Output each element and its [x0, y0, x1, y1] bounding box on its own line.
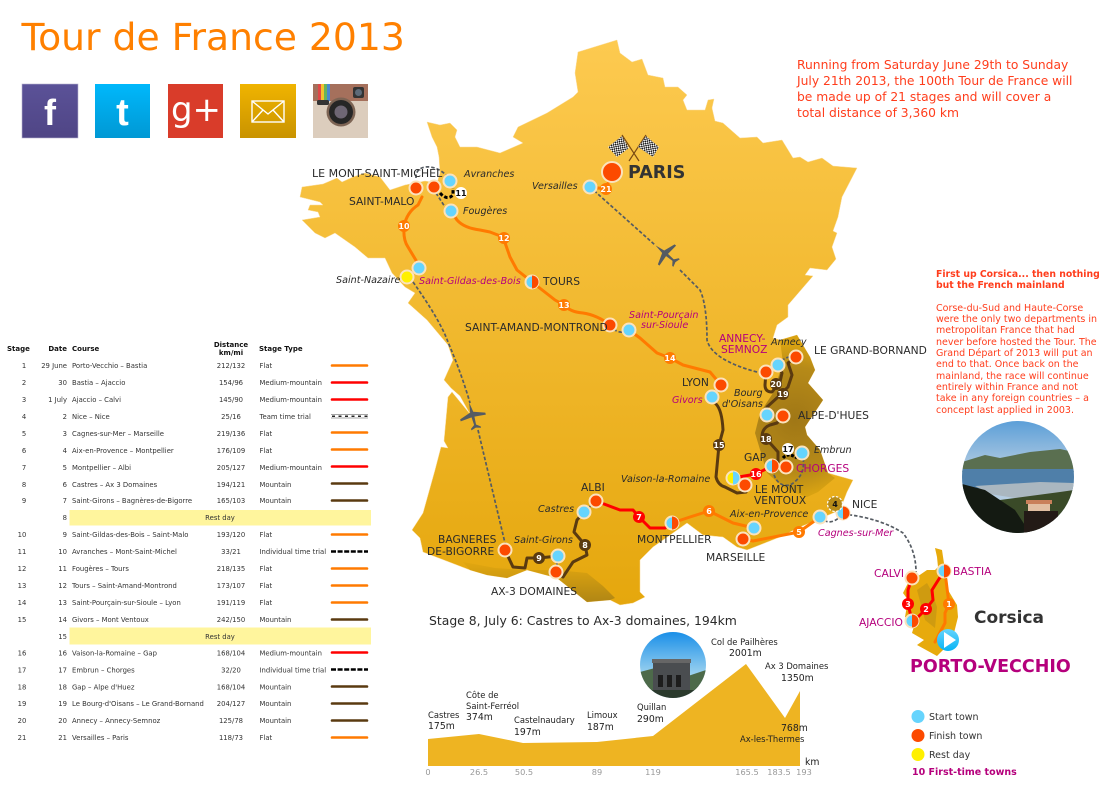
table header	[7, 341, 303, 357]
legend	[912, 710, 1017, 778]
icon: google plus	[168, 84, 223, 138]
table rows: 4	[63, 447, 67, 455]
table rows: 17	[58, 666, 67, 674]
intro text: July 21th 2013, the 100th Tour de France will	[796, 74, 1072, 88]
Corsica text block: mainland, the race will continue	[936, 371, 1089, 382]
table rows: 10	[58, 548, 67, 556]
stage number badges: 16	[750, 470, 762, 479]
table rows: Rest day	[205, 633, 235, 641]
map labels: Avranches	[463, 169, 514, 180]
table rows: Aix-en-Provence – Montpellier	[72, 447, 174, 455]
table rows: 16	[18, 650, 26, 658]
map labels: Annecy	[770, 337, 807, 348]
table rows	[18, 362, 326, 742]
chart labels: 197m	[514, 727, 541, 738]
table rows: 168/104	[217, 684, 245, 692]
social icons	[22, 84, 368, 138]
table rows: 14	[58, 616, 67, 624]
map labels: sur-Sioule	[641, 320, 688, 331]
stage number badges	[398, 183, 955, 615]
elevation profile	[425, 613, 828, 777]
table rows: 168/104	[217, 650, 245, 658]
chart labels: km	[805, 757, 819, 768]
table rows: 20	[58, 717, 67, 725]
table rows: 8	[22, 481, 26, 489]
table rows: 2	[63, 413, 67, 421]
Corsica text block: take in any foreign countries – a	[936, 393, 1089, 404]
chart labels: Côte de	[466, 690, 499, 700]
table rows: Medium-mountain	[260, 379, 322, 387]
Corsica text block: entirely within France and not	[936, 382, 1078, 393]
chart labels: 1350m	[781, 673, 814, 684]
Corsica text block: Grand Départ of 2013 will put an	[936, 348, 1093, 359]
table rows: Vaison-la-Romaine – Gap	[72, 650, 157, 658]
chart labels: 175m	[428, 721, 455, 732]
map labels: CHORGES	[796, 462, 849, 475]
table rows: 3	[63, 430, 67, 438]
table rows: 118/73	[219, 734, 243, 742]
table rows: 154/96	[219, 379, 243, 387]
table rows: Avranches – Mont-Saint-Michel	[72, 548, 177, 556]
transfer dashed lines	[413, 167, 916, 572]
table rows: 218/135	[217, 565, 245, 573]
table rows: 193/120	[217, 531, 245, 539]
area chart	[428, 664, 800, 766]
table rows: 125/78	[219, 717, 243, 725]
table rows: 10	[18, 531, 26, 539]
table rows: Nice – Nice	[72, 413, 110, 421]
Corsica text block: concept last applied in 2003.	[936, 405, 1074, 416]
chart axis: 183.5	[767, 767, 791, 777]
map labels: DE-BIGORRE	[427, 545, 494, 558]
table rows: 4	[22, 413, 26, 421]
table: stages	[7, 341, 371, 742]
table rows: 18	[58, 684, 67, 692]
Corsica text block: were the only two departments in	[936, 314, 1097, 325]
chart labels: 374m	[466, 712, 493, 723]
table rows: 21	[18, 734, 26, 742]
table rows: Flat	[260, 430, 273, 438]
Corsica text block: metropolitan France that had	[936, 325, 1075, 336]
table rows: Flat	[260, 531, 273, 539]
table rows: Ajaccio – Calvi	[72, 396, 121, 404]
stage number badges: 12	[498, 234, 510, 243]
icon: chequered flags	[608, 135, 659, 161]
map labels: MARSEILLE	[706, 551, 766, 564]
chart labels: 2001m	[729, 648, 762, 659]
title: Tour de France 2013	[20, 15, 405, 59]
table rows: 5	[22, 430, 26, 438]
table rows: Mountain	[260, 684, 291, 692]
stage routes	[404, 172, 949, 642]
map labels: LE MONT	[755, 483, 804, 496]
table rows: 25/16	[221, 413, 241, 421]
table rows: 32/20	[221, 666, 241, 674]
table header: Stage	[7, 345, 30, 353]
heading: Porto-Vecchio: PORTO-VECCHIO	[910, 657, 1071, 677]
stage number badges: 7	[636, 513, 642, 522]
table rows: Team time trial	[258, 413, 311, 421]
icon: twitter	[95, 84, 150, 138]
legend: Finish town	[929, 731, 982, 742]
map labels: ALBI	[581, 481, 605, 494]
chart labels: Ax 3 Domaines	[765, 661, 828, 671]
table rows: Flat	[260, 447, 273, 455]
chart labels: 290m	[637, 714, 664, 725]
map: France	[300, 40, 958, 656]
chart labels: Castelnaudary	[514, 715, 575, 725]
table rows: 219/136	[217, 430, 245, 438]
intro text: Running from Saturday June 29th to Sunday	[797, 58, 1068, 72]
table rows: 21	[58, 734, 67, 742]
stage type line keys	[331, 366, 368, 738]
table rows: 14	[18, 599, 26, 607]
table header: km/mi	[219, 349, 243, 357]
table rows: Individual time trial	[260, 548, 326, 556]
table rows: 16	[58, 650, 67, 658]
table rows: Porto-Vecchio – Bastia	[72, 362, 147, 370]
map labels: LE GRAND-BORNAND	[814, 344, 927, 357]
table rows: Medium-mountain	[260, 650, 322, 658]
heading: stage 8: Stage 8, July 6: Castres to Ax-3 domaines, 194km	[429, 613, 737, 628]
map labels: Aix-en-Provence	[729, 509, 808, 520]
icon: google plus: g+	[171, 90, 221, 130]
table rows: 173/107	[217, 582, 245, 590]
table rows: 7	[63, 497, 67, 505]
table rows: 20	[18, 717, 26, 725]
chart axis: 26.5	[470, 767, 488, 777]
chart labels: Ax-les-Thermes	[740, 734, 804, 744]
table header: Stage Type	[259, 345, 303, 353]
stage number badges: 21	[600, 185, 612, 194]
table rows: 6	[63, 481, 67, 489]
table rows: 7	[22, 464, 26, 472]
stage number badges: 17	[782, 445, 794, 454]
chart labels: 187m	[587, 722, 614, 733]
table rows: Annecy – Annecy-Semnoz	[72, 717, 161, 725]
stage number badges: 18	[760, 435, 772, 444]
table rows: Saint-Pourçain-sur-Sioule – Lyon	[72, 599, 181, 607]
table rows: Embrun – Chorges	[72, 666, 135, 674]
table rows: Medium-mountain	[260, 396, 322, 404]
table rows: Mountain	[260, 481, 291, 489]
legend: 10 First-time towns	[912, 767, 1017, 778]
mainland outline	[300, 40, 857, 605]
table rows: Bastia – Ajaccio	[72, 379, 125, 387]
stage number badges: 20	[770, 380, 782, 389]
table rows: 6	[22, 447, 26, 455]
map labels: SEMNOZ	[721, 343, 768, 356]
table rows: 13	[58, 599, 67, 607]
map labels: LYON	[682, 376, 709, 389]
map labels: MONTPELLIER	[637, 533, 712, 546]
table rows: Montpellier – Albi	[72, 464, 131, 472]
table rows: Givors – Mont Ventoux	[72, 616, 149, 624]
chart axis: 0	[425, 767, 431, 777]
table rows: 145/90	[219, 396, 243, 404]
Corsica text block: but the French mainland	[936, 280, 1065, 291]
table header: Distance	[214, 341, 248, 349]
icon: plane north	[647, 235, 685, 273]
icon: twitter: t	[116, 92, 129, 134]
Pyrenees mountains	[463, 562, 615, 602]
table rows: Flat	[260, 565, 273, 573]
table rows: 18	[18, 684, 26, 692]
map labels	[312, 163, 992, 629]
stage number badges: 9	[536, 554, 542, 563]
table rows: 205/127	[217, 464, 245, 472]
table rows: 242/150	[217, 616, 245, 624]
chart labels: Saint-Ferréol	[466, 701, 519, 711]
stage number badges: 6	[706, 507, 712, 516]
Corsica mountains	[917, 583, 937, 628]
table rows: Flat	[260, 582, 273, 590]
table rows: 191/119	[217, 599, 245, 607]
legend: Rest day	[929, 750, 971, 761]
stage number badges: 8	[582, 541, 588, 550]
table rows: 12	[58, 582, 67, 590]
stage number badges: 15	[713, 441, 725, 450]
table rows: Cagnes-sur-Mer – Marseille	[72, 430, 164, 438]
intro text: be made up of 21 stages and will cover a	[797, 90, 1051, 104]
map labels: Fougères	[463, 205, 507, 217]
table rows: Versailles – Paris	[72, 734, 129, 742]
map labels: BAGNERES	[438, 533, 497, 546]
Corsica text block: never before hosted the Tour. The	[936, 337, 1097, 348]
map labels: TOURS	[542, 275, 580, 288]
map labels: AJACCIO	[859, 616, 903, 629]
table rows: 33/21	[221, 548, 241, 556]
chart labels: Castres	[428, 710, 459, 720]
table rows: 13	[18, 582, 26, 590]
heading: Corsica: Corsica	[974, 608, 1044, 628]
table rows: 3	[22, 396, 26, 404]
table rows: 29 June	[41, 362, 67, 370]
table rows: Flat	[260, 362, 273, 370]
table header: Date	[48, 345, 67, 353]
table rows: 1	[22, 362, 26, 370]
chart labels	[428, 637, 828, 768]
table rows: Castres – Ax 3 Domaines	[72, 481, 158, 489]
stage number badges: 11	[455, 189, 467, 198]
table rows: 165/103	[217, 497, 245, 505]
map labels: LE MONT-SAINT-MICHEL	[312, 167, 443, 180]
stage number badges: 14	[664, 354, 676, 363]
table rows: Gap – Alpe d'Huez	[72, 684, 135, 692]
intro text: total distance of 3,360 km	[797, 106, 959, 120]
map labels: Versailles	[532, 181, 578, 192]
stage number badges: 13	[558, 301, 570, 310]
table rows: 2	[22, 379, 26, 387]
icon: instagram	[313, 84, 368, 138]
table rows: 15	[18, 616, 26, 624]
chart labels: 768m	[781, 723, 808, 734]
Corsica text block	[936, 269, 1100, 416]
chart axis: 50.5	[515, 767, 533, 777]
table rows: 5	[63, 464, 67, 472]
map labels: Givors	[672, 395, 703, 406]
chart axis: 89	[592, 767, 602, 777]
map labels: AX-3 DOMAINES	[491, 585, 577, 598]
map labels: BASTIA	[953, 565, 992, 578]
chart labels: Quillan	[637, 702, 666, 712]
photo: Col de Pailhères	[640, 632, 706, 698]
map labels: Saint-Gildas-des-Bois	[419, 276, 521, 287]
table rows: Le Bourg-d'Oisans – Le Grand-Bornand	[72, 700, 204, 708]
table rows: 9	[22, 497, 26, 505]
map labels: Embrun	[814, 445, 852, 456]
table rows: 8	[63, 514, 67, 522]
table rows: 30	[58, 379, 67, 387]
Corsica island	[903, 548, 958, 656]
map labels: PARIS	[628, 163, 685, 183]
stage number badges: 2	[923, 605, 929, 614]
table header: Course	[72, 345, 100, 353]
rest day bars	[70, 510, 371, 644]
map labels: ANNECY-	[719, 332, 766, 345]
table rows: Mountain	[260, 616, 291, 624]
chart axis	[425, 767, 812, 777]
table rows: 1 July	[48, 396, 67, 404]
stage number badges: 1	[946, 600, 952, 609]
table rows: Rest day	[205, 514, 235, 522]
table rows: Tours – Saint-Amand-Montrond	[71, 582, 177, 590]
icon: facebook	[22, 84, 78, 138]
chart labels: Limoux	[587, 710, 618, 720]
table rows: Fougères – Tours	[72, 565, 129, 573]
table rows: Flat	[260, 734, 273, 742]
table rows: 17	[18, 666, 26, 674]
table rows: 212/132	[217, 362, 245, 370]
map labels: SAINT-MALO	[349, 195, 414, 208]
chart axis: 193	[796, 767, 812, 777]
icon: facebook: f	[44, 92, 57, 133]
map labels: CALVI	[874, 567, 904, 580]
table rows: Individual time trial	[260, 666, 326, 674]
map labels: GAP	[744, 451, 767, 464]
map labels: Saint-Nazaire	[336, 275, 401, 286]
stage number badges: 4	[832, 500, 838, 509]
table rows: Flat	[260, 599, 273, 607]
table rows: 194/121	[217, 481, 245, 489]
map labels: SAINT-AMAND-MONTROND	[465, 321, 608, 334]
map labels: Castres	[538, 504, 574, 515]
photo: Corsica harbour	[962, 421, 1074, 533]
icon: Porto-Vecchio start	[937, 629, 959, 651]
map labels: Bourg	[734, 388, 763, 399]
chart labels: Col de Pailhères	[711, 637, 778, 647]
table rows: Mountain	[260, 717, 291, 725]
map labels: NICE	[852, 498, 878, 511]
Corsica text block: First up Corsica... then nothing	[936, 269, 1100, 280]
map labels: VENTOUX	[754, 494, 806, 507]
stage number badges: 10	[398, 222, 410, 231]
table rows: Medium-mountain	[260, 464, 322, 472]
map labels: Saint-Girons	[514, 535, 573, 546]
map labels: Cagnes-sur-Mer	[818, 528, 894, 539]
Corsica text block: end to that. Once back on the	[936, 359, 1079, 370]
table rows: 176/109	[217, 447, 245, 455]
icon: mail	[240, 84, 296, 138]
Alps mountains	[755, 335, 835, 497]
icon: plane south	[457, 399, 489, 432]
chart axis: 165.5	[735, 767, 759, 777]
intro text	[796, 58, 1072, 120]
table rows: Saint-Girons – Bagnères-de-Bigorre	[72, 497, 192, 505]
Corsica text block: Corse-du-Sud and Haute-Corse	[936, 303, 1083, 314]
town markers	[400, 162, 950, 628]
stage number badges: 19	[777, 390, 789, 399]
table rows: 11	[58, 565, 67, 573]
table rows: Mountain	[260, 497, 291, 505]
table rows: 11	[18, 548, 26, 556]
table rows: 12	[18, 565, 26, 573]
stage number badges: 5	[796, 528, 802, 537]
map labels: Saint-Pourçain	[629, 310, 699, 321]
table rows: 19	[58, 700, 67, 708]
table rows: Mountain	[260, 700, 291, 708]
map labels: d'Oisans	[722, 399, 763, 410]
table rows: 19	[18, 700, 26, 708]
table rows: 204/127	[217, 700, 245, 708]
table rows: 15	[58, 633, 67, 641]
chart axis: 119	[645, 767, 661, 777]
table rows: 9	[63, 531, 67, 539]
map labels: ALPE-D'HUES	[798, 409, 869, 422]
stage number badges: 3	[905, 600, 911, 609]
legend: Start town	[929, 712, 979, 723]
table rows: Saint-Gildas-des-Bois – Saint-Malo	[72, 531, 188, 539]
map labels: Vaison-la-Romaine	[621, 474, 710, 485]
